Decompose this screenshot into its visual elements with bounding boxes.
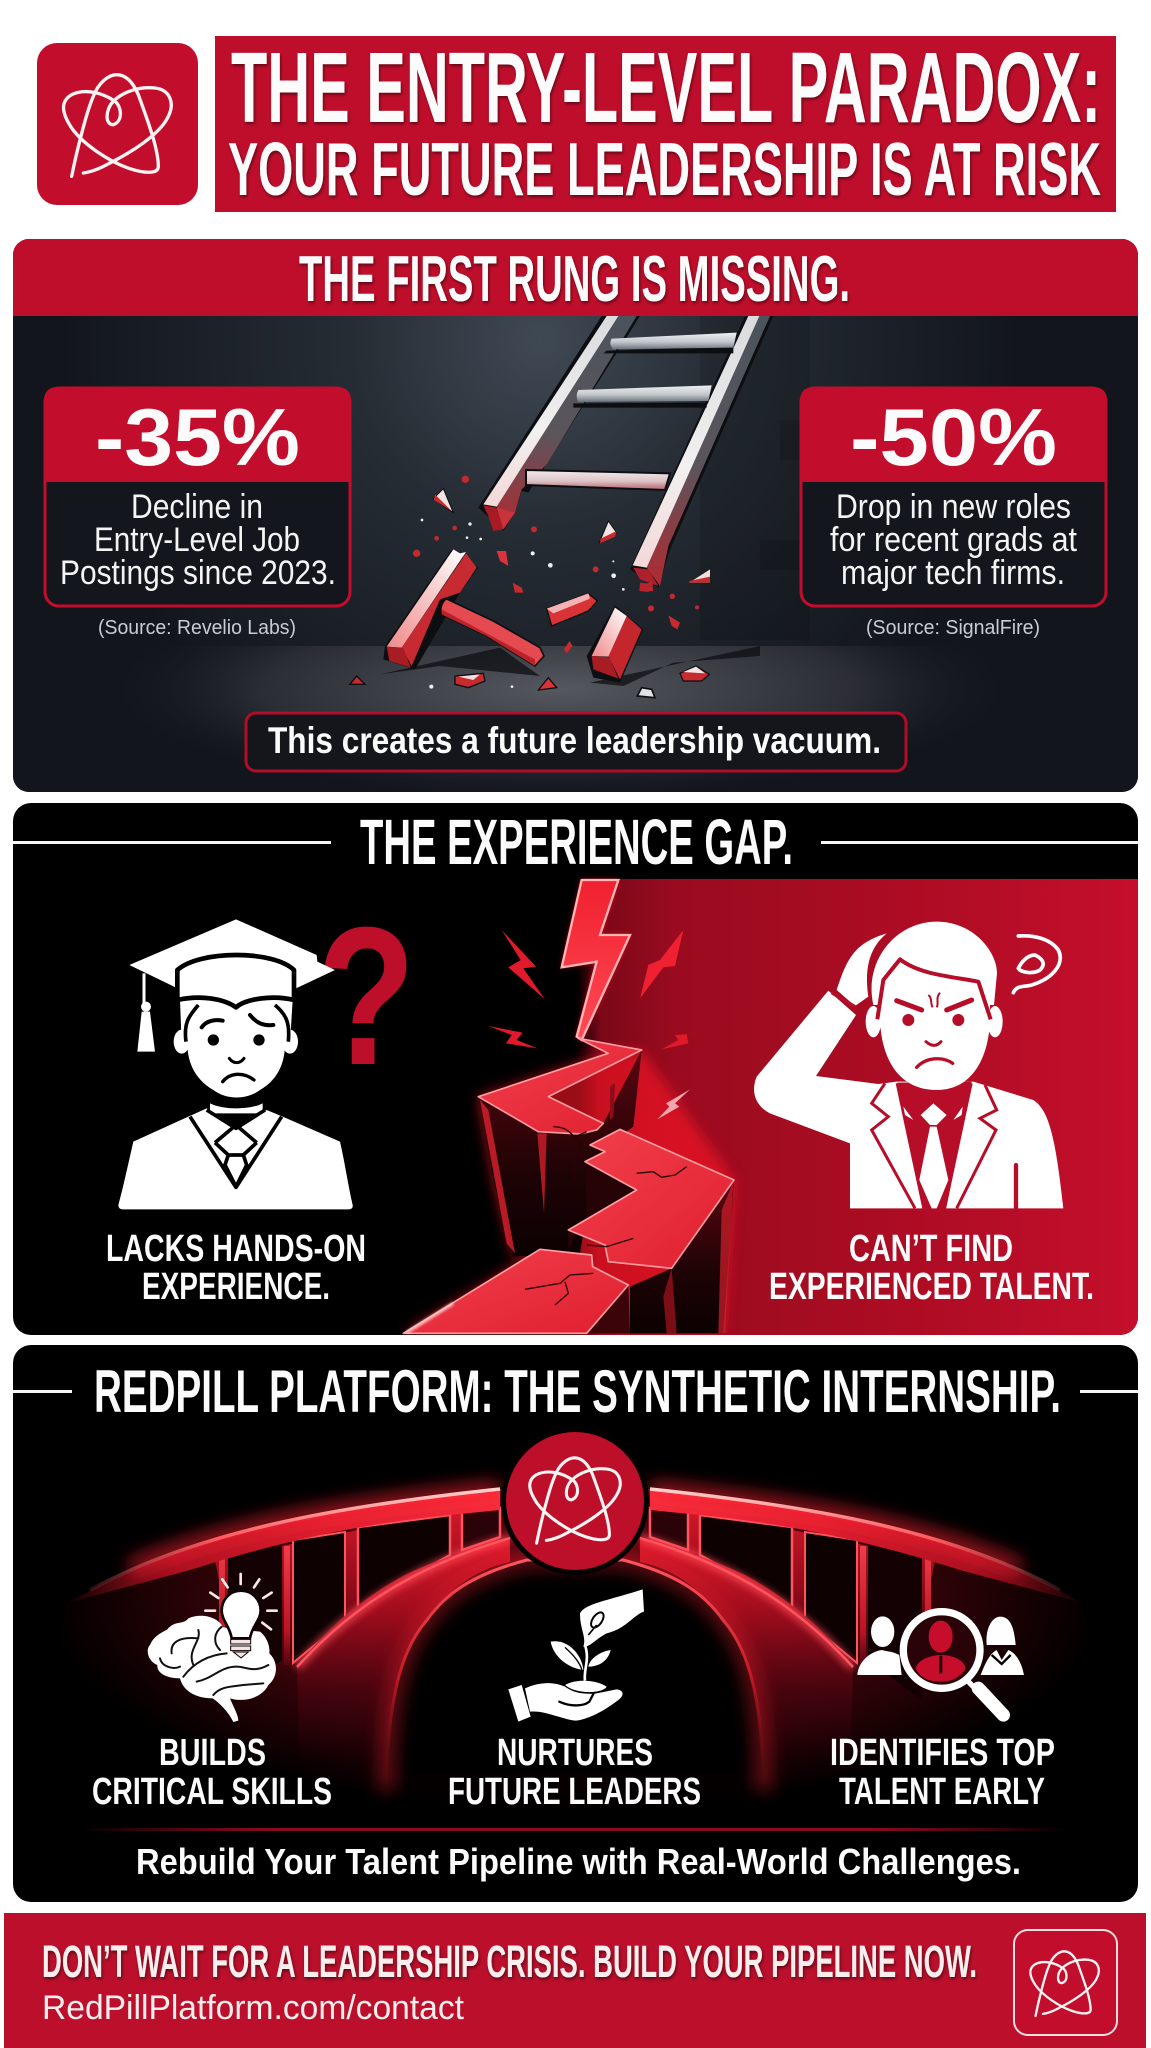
floor shadows (380, 646, 760, 686)
label: nurtures future leaders (448, 1732, 701, 1813)
small sparks (488, 930, 707, 1119)
label: builds critical skills: BUILDS (159, 1732, 266, 1774)
icon: brain and lightbulb (148, 1574, 277, 1722)
label: nurtures future leaders: FUTURE LEADERS (448, 1771, 701, 1813)
label: builds critical skills: CRITICAL SKILLS (92, 1771, 332, 1813)
label: lacks hands-on experience: EXPERIENCE. (142, 1266, 330, 1308)
stat value: -50% (850, 393, 1057, 483)
label: identifies top talent early: TALENT EARLY (839, 1771, 1045, 1813)
heading with rules (13, 819, 1138, 864)
label: can't find experienced talent: CAN’T FIND (849, 1228, 1013, 1270)
heading band (13, 239, 1138, 316)
stat card: -35% (44, 387, 351, 606)
stat description: Decline in (131, 488, 263, 526)
stat description: Postings since 2023. (60, 554, 336, 592)
logo medallion (501, 1427, 649, 1575)
stat description (830, 488, 1077, 592)
stat value: -35% (95, 393, 300, 483)
stat description: for recent grads at (830, 521, 1077, 559)
stat description: Entry-Level Job (94, 521, 300, 559)
icon: frustrated manager (754, 922, 1063, 1209)
tagline: Rebuild Your Talent Pipeline with Real-World Challenges. (136, 1841, 1021, 1882)
icon: hand nurturing seedling (508, 1589, 644, 1722)
title banner (215, 32, 1116, 212)
cliff walls (478, 1050, 642, 1257)
label: can't find experienced talent (770, 1234, 1092, 1300)
left rail (478, 316, 640, 531)
broken ladder illustration (350, 316, 773, 698)
label: identifies top talent early (830, 1732, 1055, 1813)
label: builds critical skills (92, 1732, 332, 1813)
label: lacks hands-on experience (108, 1234, 364, 1300)
right rail (630, 316, 773, 588)
heading with rules: THE EXPERIENCE GAP. (360, 806, 793, 878)
broken rung fragment (441, 599, 544, 666)
lightning bolt (562, 880, 630, 1040)
middle ledge (568, 1129, 734, 1268)
lower ledge (403, 1249, 628, 1333)
inner arch opening (387, 1560, 763, 1770)
crack lines (525, 1127, 687, 1305)
question mark: ? (317, 886, 416, 1106)
callout: leadership vacuum: This creates a future leadership vacuum. (268, 720, 881, 761)
panel: the synthetic internship (13, 1345, 1138, 1902)
panel: the first rung is missing (13, 239, 1138, 792)
stat description: Drop in new roles (836, 488, 1071, 526)
dizzy swirl (1013, 936, 1060, 993)
icon: magnifier over candidates (857, 1612, 1024, 1715)
upper ledge (478, 1038, 642, 1134)
callout: leadership vacuum (246, 713, 906, 771)
shards and debris (433, 489, 453, 513)
source: Revelio Labs: (Source: Revelio Labs) (98, 617, 296, 639)
heading with rules (13, 1370, 1138, 1412)
stat card: -50% (800, 387, 1107, 606)
red haze under the deck (20, 1489, 1130, 1860)
contact url: RedPillPlatform.com/contact (42, 1989, 465, 2027)
glowing crack illustration (403, 880, 734, 1333)
panel: the experience gap (13, 803, 1138, 1335)
footer call to action (4, 1913, 1146, 2048)
source: SignalFire: (Source: SignalFire) (866, 617, 1040, 639)
stat description (60, 488, 336, 592)
rungs (603, 347, 733, 353)
header logo tile (37, 43, 198, 205)
footer logo (1014, 1930, 1117, 2035)
stat description: major tech firms. (841, 554, 1065, 592)
label: identifies top talent early: IDENTIFIES TOP (830, 1732, 1055, 1774)
broken stump left (383, 549, 478, 669)
glowing bridge (20, 1489, 1130, 1860)
label: lacks hands-on experience: LACKS HANDS-ON (106, 1228, 366, 1270)
glow (403, 1050, 734, 1333)
label: nurtures future leaders: NURTURES (497, 1732, 653, 1774)
icon: confused graduate (118, 919, 406, 1210)
broken stump right (587, 605, 643, 683)
small fragment (547, 593, 597, 626)
